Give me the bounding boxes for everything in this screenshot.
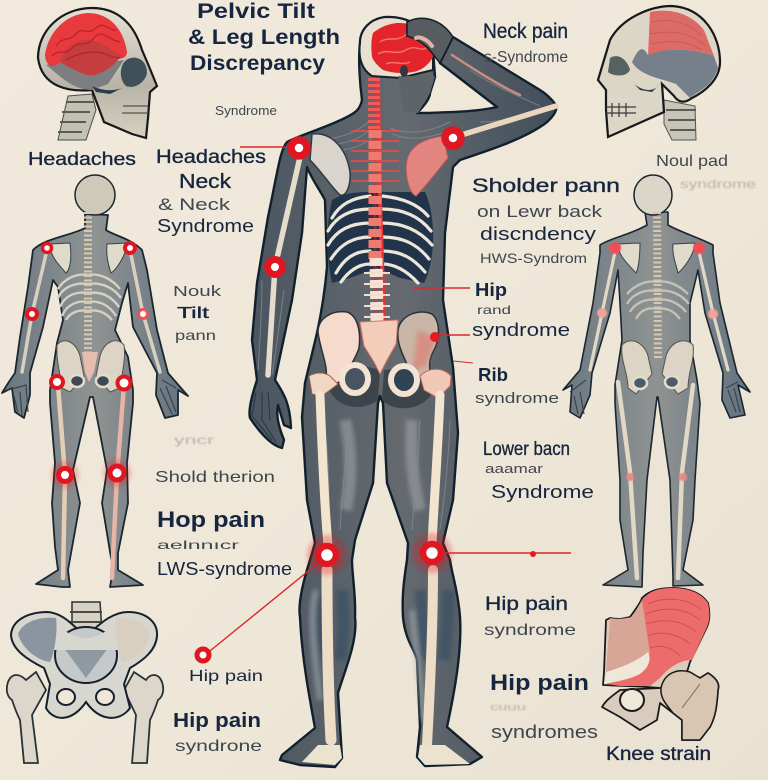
muscle shading [313, 420, 448, 720]
label: hip pain syndrome: syndrone [175, 738, 262, 755]
sacrum ring [55, 627, 117, 683]
label: sholder pann [472, 176, 620, 266]
right figure ribs [627, 282, 689, 319]
leg bones [320, 395, 440, 745]
labels: right column [472, 20, 756, 765]
label: hip pain syndromes lower: cuuu [490, 702, 526, 712]
label: hip rand syndrome: rand [477, 303, 511, 317]
label: hip pain syndrome: Hip pain [173, 710, 261, 732]
muscle streaks [258, 70, 540, 540]
ilium [11, 612, 157, 718]
scapulae [310, 134, 350, 195]
label: hip pain syndromes lower [490, 670, 598, 742]
hip bone [602, 588, 719, 740]
right figure head [634, 175, 672, 215]
right figure scapulae [618, 243, 695, 273]
label: hop pain: aelnnıcr [157, 538, 239, 552]
left small figure [2, 175, 188, 587]
label: hip pain syndromes lower: syndromes [491, 722, 598, 742]
label: sholder pann: discndency [480, 224, 596, 244]
small figure body [2, 214, 188, 587]
label: hip pain syndrome upper: syndrome [484, 622, 576, 639]
label: neck pain: Neck pain [483, 20, 568, 43]
vertebra [72, 602, 102, 632]
right small figure [563, 175, 750, 587]
right figure spine [657, 212, 658, 358]
right figure bones [590, 252, 728, 578]
small figure scapulae [50, 243, 127, 273]
small figure spine [84, 212, 92, 352]
femurs [7, 672, 46, 763]
label: shold therion: Shold therion [155, 469, 275, 486]
label: headaches neck syndrome: Neck [179, 171, 232, 193]
label: nouk tilt pann [173, 283, 222, 343]
label: headaches neck syndrome: Headaches [156, 147, 266, 168]
label: hip pain small: Hip pain [189, 668, 263, 685]
red ilium [606, 588, 709, 686]
label: headaches neck syndrome [156, 147, 266, 236]
label: headaches neck syndrome: & Neck [158, 195, 231, 214]
label: sholder pann: HWS-Syndrom [480, 250, 587, 266]
label: hop pain: Hop pain [157, 507, 265, 532]
pain markers and leader lines on central figure [197, 130, 571, 661]
spine [368, 78, 380, 130]
body silhouette [249, 17, 556, 767]
spine glow [374, 78, 376, 320]
label: hip pain syndrome upper: Hip pain [485, 594, 568, 615]
arm bones [268, 55, 556, 375]
rib cage [328, 192, 433, 283]
label: sholder pann: Sholder pann [472, 176, 620, 197]
label: rib syndrome [475, 365, 559, 407]
label: noul pad [656, 153, 756, 191]
sciatic notch [604, 652, 650, 684]
label: hip pain syndrome [173, 710, 262, 755]
icon: left skull with red brain [38, 8, 157, 140]
hand details [252, 392, 276, 442]
pain markers on left figure [27, 243, 148, 489]
femur [661, 671, 719, 740]
label: hip rand syndrome: Hip [475, 280, 507, 300]
title: Discrepancy [190, 52, 325, 75]
obturator hole [620, 689, 644, 711]
label: lower back syndrome: aaamar [485, 461, 544, 476]
label: sholder pann: on Lewr back [477, 202, 603, 221]
label: headaches: Headaches [28, 149, 136, 169]
label: hop pain: LWS-syndrome [157, 559, 292, 579]
label: headaches neck syndrome: Syndrome [157, 216, 254, 236]
title: & Leg Length [188, 26, 340, 49]
label: lower back syndrome: Syndrome [491, 482, 594, 502]
right figure body [563, 212, 750, 587]
central figure [249, 17, 556, 767]
label: knee strain: Knee strain [606, 744, 711, 765]
icon: right skull [598, 6, 720, 140]
small figure ribs [58, 275, 121, 320]
small figure head [75, 175, 115, 215]
head and brain [360, 17, 433, 78]
labels: left column [28, 103, 292, 755]
title: Pelvic Tilt [197, 0, 315, 23]
label: hop pain [157, 507, 292, 579]
label: syndrome under title: Syndrome [215, 103, 277, 118]
right figure pelvis [622, 341, 693, 394]
label: neck pain: s-Syndrome [484, 49, 568, 66]
label: hip pain syndromes lower: Hip pain [490, 670, 589, 695]
right figure hands [570, 380, 740, 414]
label: neck pain [483, 20, 568, 66]
small figure hands [8, 380, 176, 416]
label: rib syndrome: syndrome [475, 390, 559, 407]
label: nouk tilt pann: Tilt [177, 305, 210, 322]
faint label: yncr [174, 433, 214, 447]
label: hip pain syndrome upper [484, 594, 576, 639]
icon: pelvis bottom left [7, 602, 163, 763]
small figure pelvis [57, 341, 125, 392]
icon: hip joint bottom right [602, 588, 719, 740]
title [188, 0, 340, 75]
small figure bones [22, 250, 160, 578]
obturator foramina [57, 689, 75, 705]
hand on head [407, 18, 453, 63]
face and ear [398, 76, 435, 113]
iliac wing [606, 600, 650, 672]
label: nouk tilt pann: Nouk [173, 283, 222, 300]
label: rib syndrome: Rib [478, 365, 508, 385]
label: noul pad: syndrome [680, 177, 756, 191]
heels [302, 745, 470, 765]
label: noul pad: Noul pad [656, 153, 728, 170]
label: lower back syndrome [483, 439, 594, 502]
label: lower back syndrome: Lower bacn [483, 439, 570, 460]
label: hip rand syndrome: syndrome [472, 320, 570, 340]
right figure joints [597, 242, 718, 481]
label: nouk tilt pann: pann [175, 327, 216, 343]
pelvis [318, 312, 360, 385]
gluteal shading [328, 360, 434, 408]
label: hip rand syndrome [472, 280, 570, 340]
